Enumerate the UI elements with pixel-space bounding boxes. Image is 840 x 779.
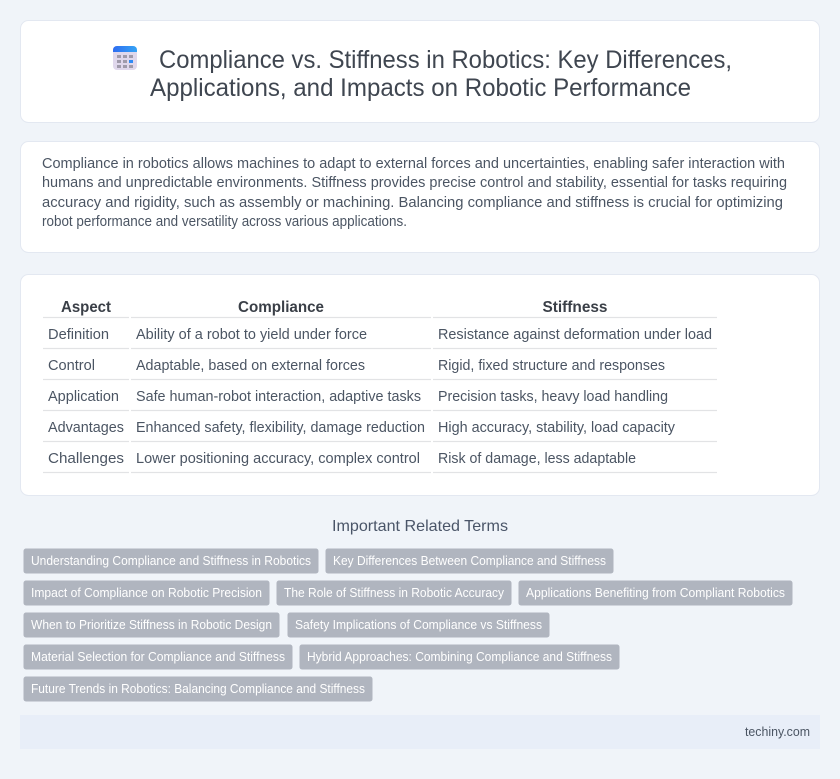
- tag: [518, 580, 792, 606]
- related terms heading: Important Related Terms: [332, 518, 508, 535]
- panel: header: [20, 20, 820, 122]
- table row: control: Adaptable, based on external forces: [136, 358, 365, 374]
- table row: advantages: High accuracy, stability, load capacity: [438, 420, 676, 436]
- tag: [24, 676, 372, 702]
- panel: summary text: Compliance in robotics allows machines to adapt to external forces and uncertainties, enabling safer interaction with: [42, 156, 785, 172]
- table row: control: [48, 358, 665, 374]
- table column headers: [61, 299, 608, 316]
- table column headers: Compliance: [238, 299, 324, 316]
- related terms tags: [24, 548, 792, 702]
- table row: application: Application: [48, 389, 119, 405]
- tag: Understanding Compliance and Stiffness in Robotics: [31, 554, 311, 568]
- tag: [276, 580, 512, 606]
- panel: summary text: [20, 142, 820, 252]
- tag: When to Prioritize Stiffness in Robotic Design: [31, 618, 272, 632]
- tag: [300, 644, 620, 670]
- panel: summary text: robot performance and versatility across various applications.: [42, 214, 407, 230]
- tag: [24, 612, 280, 638]
- tag: [24, 644, 292, 670]
- footer: [20, 715, 820, 749]
- table row: definition: Ability of a robot to yield under force: [136, 327, 367, 343]
- table row: application: Precision tasks, heavy load handling: [438, 389, 668, 405]
- tag: Impact of Compliance on Robotic Precision: [31, 586, 262, 600]
- tag: Material Selection for Compliance and Stiffness: [31, 650, 285, 664]
- tag: Applications Benefiting from Compliant Robotics: [526, 586, 785, 600]
- table row: challenges: Challenges: [48, 451, 124, 467]
- table row: definition: [48, 327, 712, 343]
- table row: definition: Definition: [48, 327, 109, 343]
- tag: Safety Implications of Compliance vs Stiffness: [295, 618, 542, 632]
- tag: The Role of Stiffness in Robotic Accuracy: [284, 586, 505, 600]
- tag: Future Trends in Robotics: Balancing Compliance and Stiffness: [31, 682, 365, 696]
- panel: summary text: accuracy and rigidity, such as assembly or machining. Balancing compliance and stiffness is crucial for optimizing: [42, 195, 783, 211]
- title: Compliance vs. Stiffness in Robotics: Key Differences,: [159, 46, 732, 74]
- table row: challenges: [48, 451, 636, 467]
- table column headers: Stiffness: [542, 299, 608, 316]
- table column headers: Aspect: [61, 299, 111, 316]
- table row: challenges: Lower positioning accuracy, complex control: [136, 451, 420, 467]
- icon: calendar: [113, 46, 137, 70]
- tag: [24, 580, 270, 606]
- tag: [288, 612, 550, 638]
- table row: challenges: Risk of damage, less adaptable: [438, 451, 636, 467]
- table row: definition: Resistance against deformation under load: [438, 327, 712, 343]
- tag: [24, 548, 318, 574]
- footer credit: techiny.com: [745, 724, 810, 739]
- table row: control: Rigid, fixed structure and responses: [438, 358, 665, 374]
- panel: comparison table: [20, 274, 820, 496]
- table row: control: Control: [48, 358, 95, 374]
- table row: advantages: [48, 420, 676, 436]
- table row: advantages: Enhanced safety, flexibility, damage reduction: [136, 420, 425, 436]
- tag: [326, 548, 614, 574]
- panel: summary text: humans and unpredictable environments. Stiffness provides precise control and stability, essential for tasks requiring: [42, 175, 787, 191]
- tag: Hybrid Approaches: Combining Compliance and Stiffness: [307, 650, 612, 664]
- title: Applications, and Impacts on Robotic Performance: [150, 74, 691, 102]
- tag: Key Differences Between Compliance and Stiffness: [333, 554, 606, 568]
- table row: application: Safe human-robot interaction, adaptive tasks: [136, 389, 421, 405]
- title: [150, 46, 732, 102]
- table row: application: [48, 389, 668, 405]
- table row: advantages: Advantages: [48, 420, 124, 436]
